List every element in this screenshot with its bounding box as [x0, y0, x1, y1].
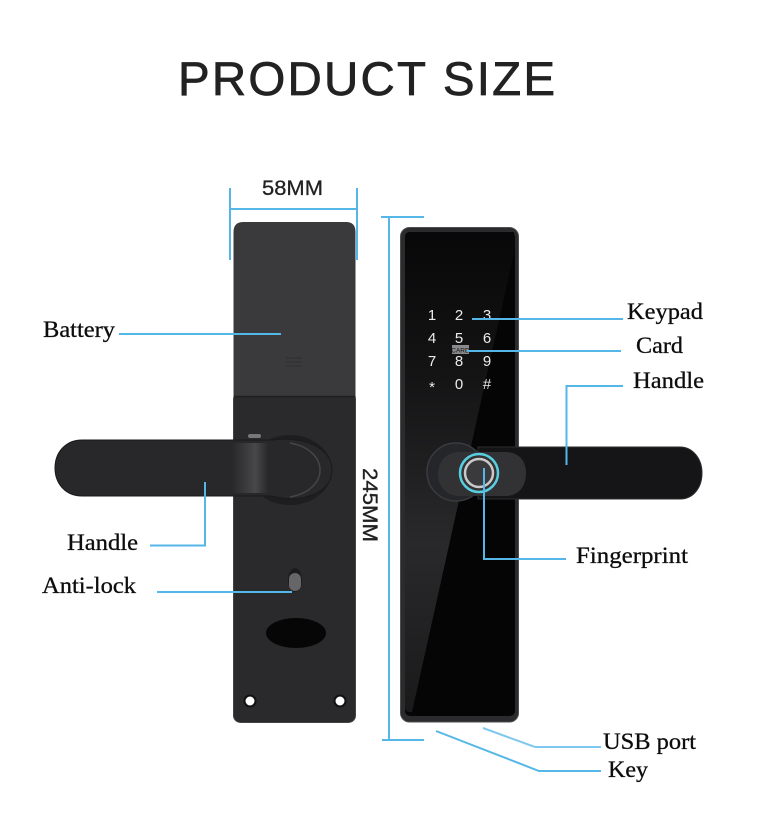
- width dimension: 58MM: [262, 177, 323, 200]
- keypad digits: 6: [483, 330, 491, 347]
- label: key: Key: [608, 757, 648, 783]
- label: left handle: [67, 482, 205, 556]
- height dimension: [358, 217, 424, 740]
- label: keypad: Keypad: [627, 299, 703, 325]
- battery mark: [286, 358, 302, 366]
- label: fingerprint: Fingerprint: [576, 543, 688, 569]
- keyhole: [266, 618, 326, 648]
- height dimension: 245MM: [358, 468, 381, 542]
- lower back plate: [234, 392, 356, 722]
- label: usb port: [483, 728, 696, 755]
- keypad digits: 8: [455, 353, 463, 370]
- keypad digits: #: [483, 376, 492, 393]
- card reader mark: CARD: [451, 348, 470, 354]
- glass reflection: [405, 232, 515, 712]
- label: key: [436, 731, 648, 783]
- keypad digits: 9: [483, 353, 491, 370]
- back panel lock: [55, 222, 356, 722]
- front panel lock: [400, 228, 702, 722]
- title: PRODUCT SIZE: [178, 53, 555, 106]
- width dimension: [230, 177, 357, 260]
- label: usb port: USB port: [603, 729, 696, 755]
- keypad digits: 0: [455, 376, 463, 393]
- anti-lock switch: [288, 568, 302, 592]
- lever head arc: [290, 443, 320, 497]
- keypad digits: 7: [428, 353, 436, 370]
- front rosette: [427, 443, 485, 501]
- keypad digits: 3: [483, 307, 491, 324]
- lever cap: [438, 452, 526, 496]
- screw hole left: [244, 696, 256, 706]
- battery cover: [234, 222, 356, 396]
- label: right handle: Handle: [633, 368, 704, 394]
- handle screw: [248, 434, 261, 438]
- keypad digits: 1: [428, 307, 436, 324]
- screw hole right: [334, 696, 346, 706]
- label: card: Card: [636, 333, 683, 359]
- left lever handle: [55, 439, 332, 499]
- keypad digits: [428, 307, 492, 396]
- label: fingerprint: [484, 468, 688, 569]
- glass face: [405, 232, 515, 716]
- lever highlight: [232, 443, 268, 493]
- rosette: [248, 435, 332, 505]
- label: battery: Battery: [43, 317, 115, 343]
- keypad digits: *: [429, 379, 435, 396]
- fingerprint sensor: [460, 454, 498, 492]
- front lever handle: [478, 447, 702, 499]
- label: left handle: Handle: [67, 530, 138, 556]
- label: right handle: [566, 368, 704, 465]
- label: anti-lock: Anti-lock: [42, 573, 136, 599]
- battery cover seam: [234, 396, 356, 398]
- keypad digits: 5: [455, 330, 463, 347]
- keypad digits: 2: [455, 307, 463, 324]
- front frame: [400, 228, 518, 722]
- keypad digits: 4: [428, 330, 436, 347]
